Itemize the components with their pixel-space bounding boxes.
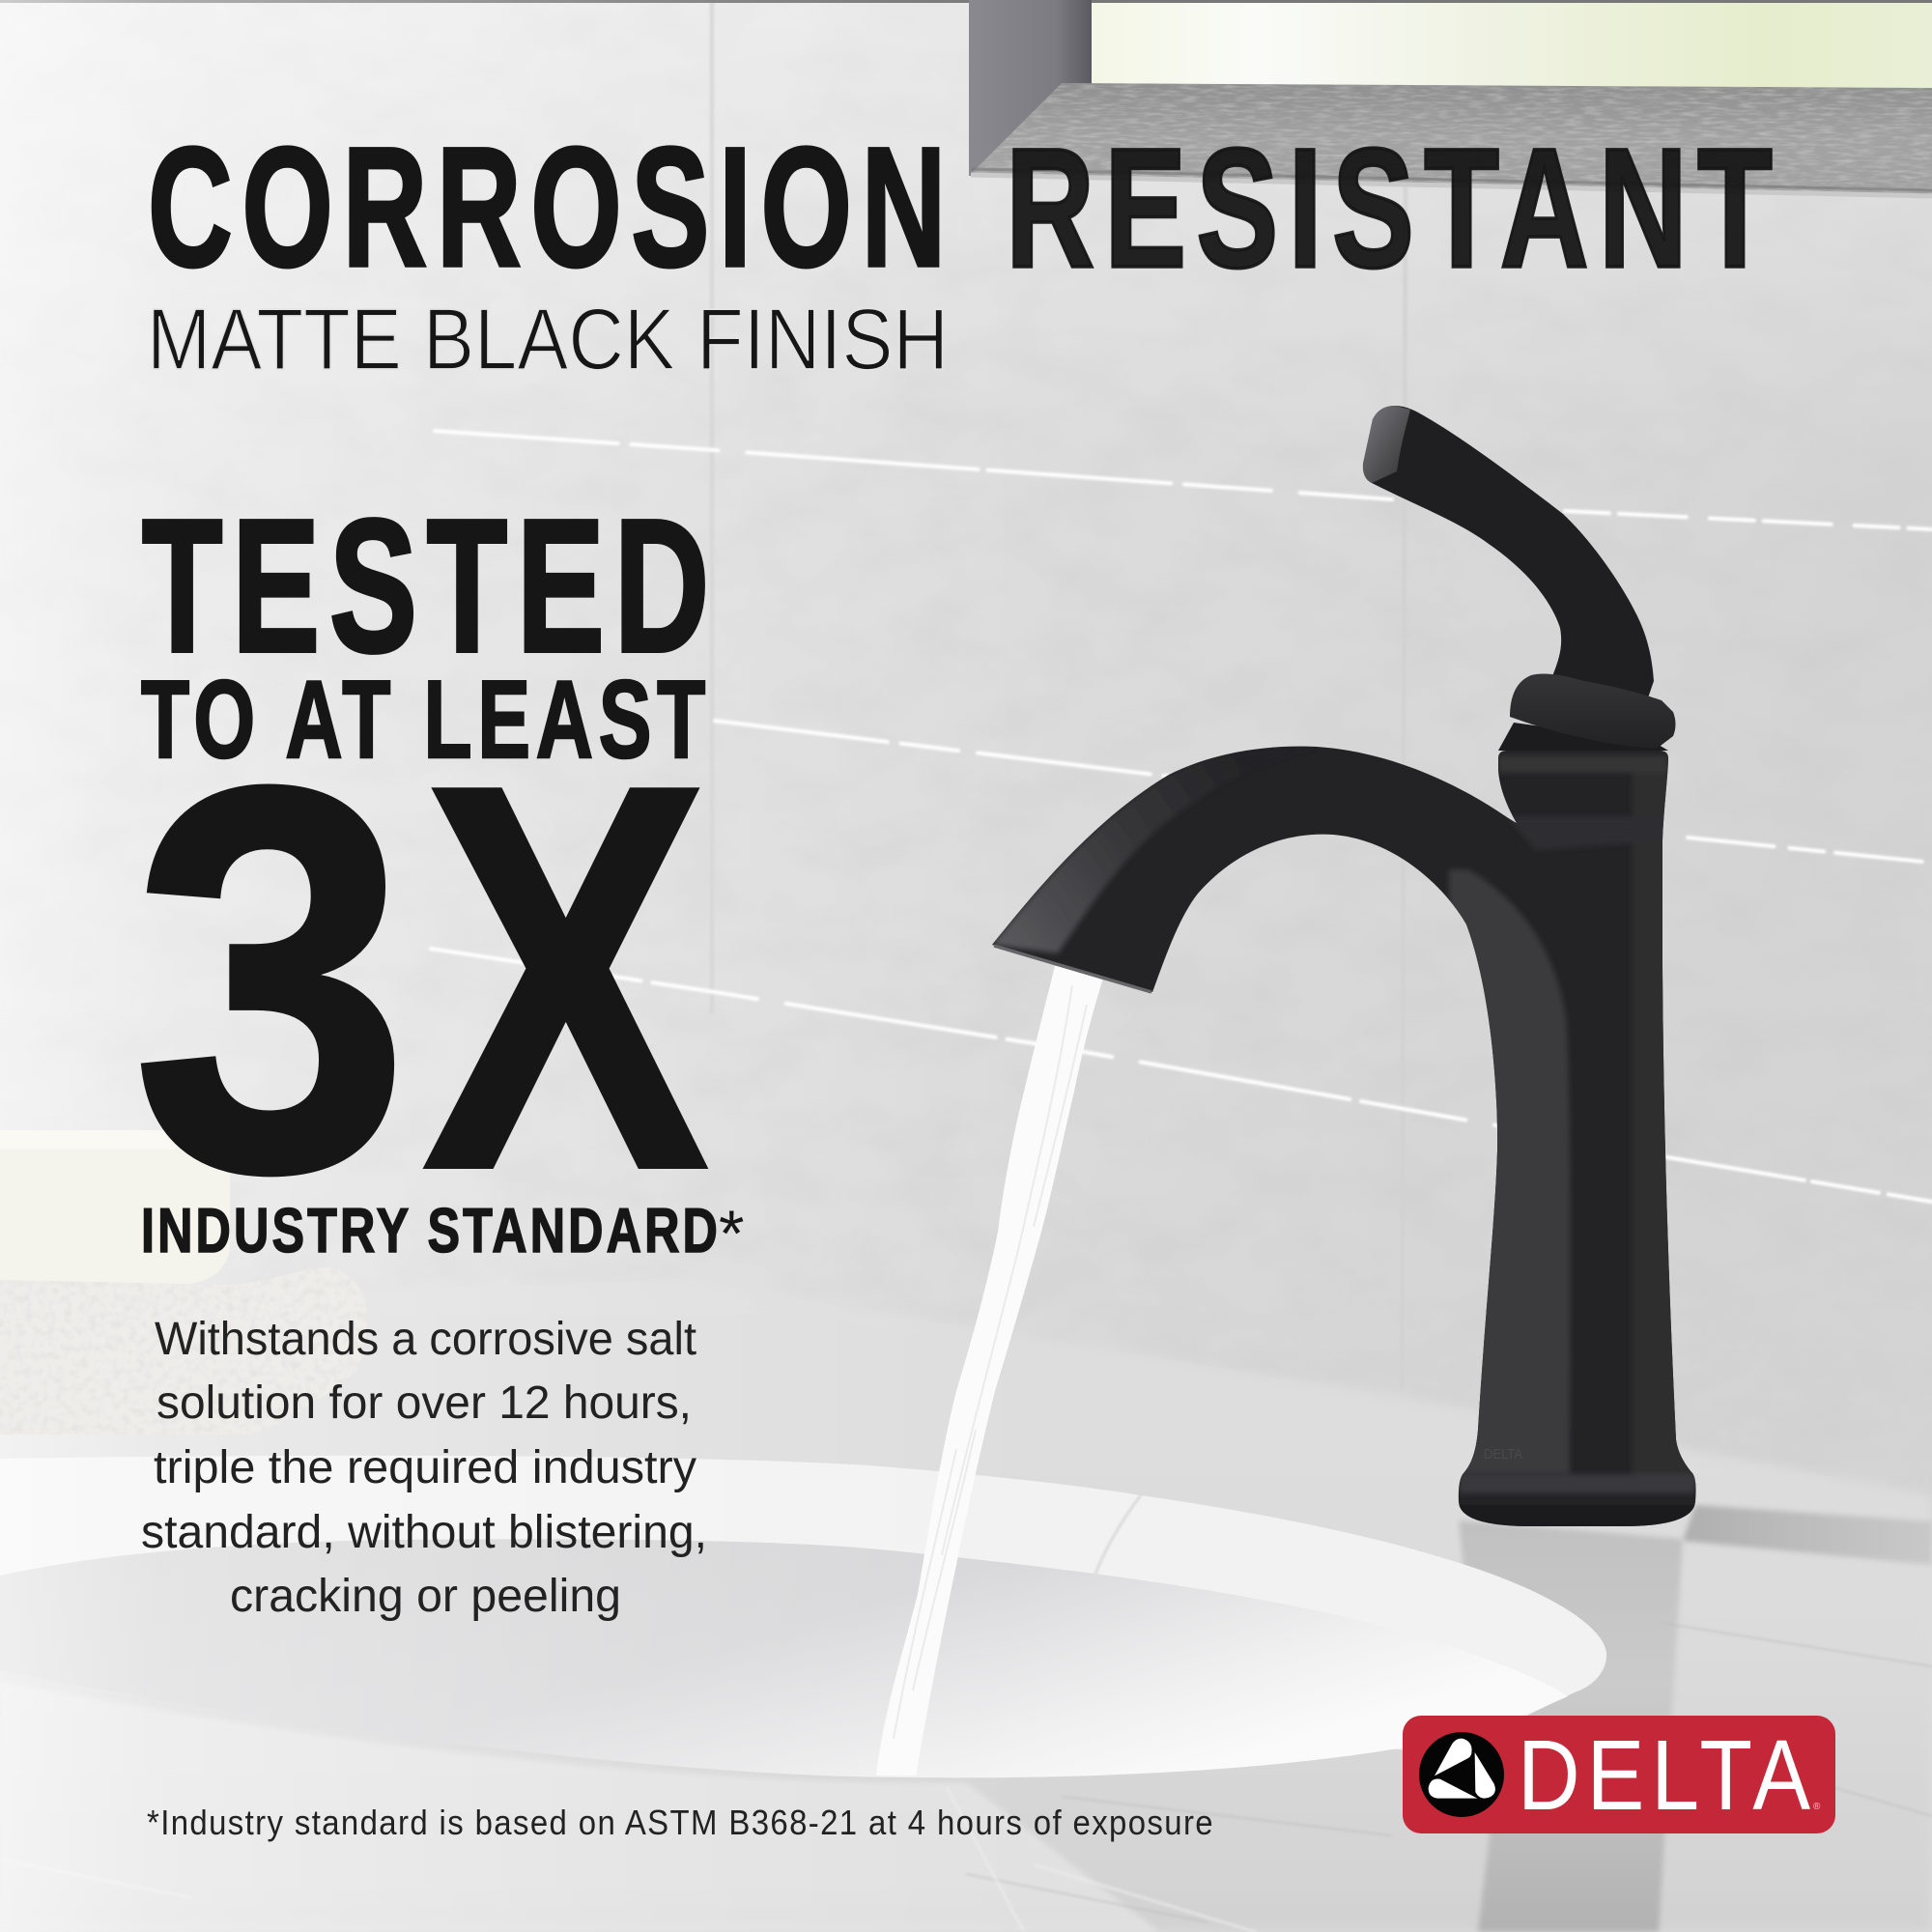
footnote: *Industry standard is based on ASTM B368-21 at 4 hours of exposure [147, 1803, 1214, 1842]
claim: tested to at least 3X industry standard: X [423, 672, 710, 1282]
mirror frame [0, 0, 1932, 203]
description text: Withstands a corrosive salt [155, 1314, 696, 1365]
sink rim [0, 1456, 1606, 1753]
white wash overlay [0, 0, 1043, 1932]
logo wordmark: DELTA [1518, 1719, 1817, 1831]
brand mark on base: DELTA [1484, 1446, 1522, 1463]
description text: solution for over 12 hours, [156, 1378, 692, 1429]
window view [1092, 3, 1932, 90]
claim: tested to at least 3X industry standard: 3 [132, 674, 410, 1284]
faucet aerator lip [994, 946, 1151, 992]
description text [141, 1314, 707, 1622]
subtitle: matte black finish: MATTE BLACK FINISH [147, 292, 949, 388]
countertop [0, 1280, 1932, 1932]
claim: tested to at least 3X industry standard: TO AT LEAST [141, 659, 711, 781]
claim: tested to at least 3X industry standard: TESTED [142, 480, 719, 692]
wall tiles [0, 0, 1932, 1546]
faucet [992, 406, 1700, 1531]
description text: standard, without blistering, [141, 1507, 707, 1558]
water stream [876, 966, 1106, 1776]
rim vein [1092, 1495, 1141, 1584]
faucet handle [1363, 406, 1654, 715]
soap dish [0, 1130, 230, 1285]
faucet shading [992, 747, 1700, 1531]
claim: tested to at least 3X industry standard: * [719, 1197, 744, 1270]
claim: tested to at least 3X industry standard [132, 480, 744, 1284]
registered mark: ® [1813, 1802, 1821, 1812]
logo: Delta [1403, 1716, 1835, 1833]
towel [0, 1267, 367, 1435]
claim: tested to at least 3X industry standard: INDUSTRY STANDARD [141, 1195, 721, 1265]
icon: delta triangle drops [1429, 1739, 1495, 1799]
faucet collar [1510, 673, 1675, 749]
description text: cracking or peeling [230, 1571, 621, 1622]
neck gap under collar [1498, 723, 1668, 751]
title: corrosion resistant: CORROSION [148, 113, 955, 302]
handle tip facet [1363, 406, 1410, 483]
basin [0, 1539, 1568, 1777]
faucet spout and body [992, 747, 1696, 1526]
description text: triple the required industry [154, 1442, 696, 1493]
